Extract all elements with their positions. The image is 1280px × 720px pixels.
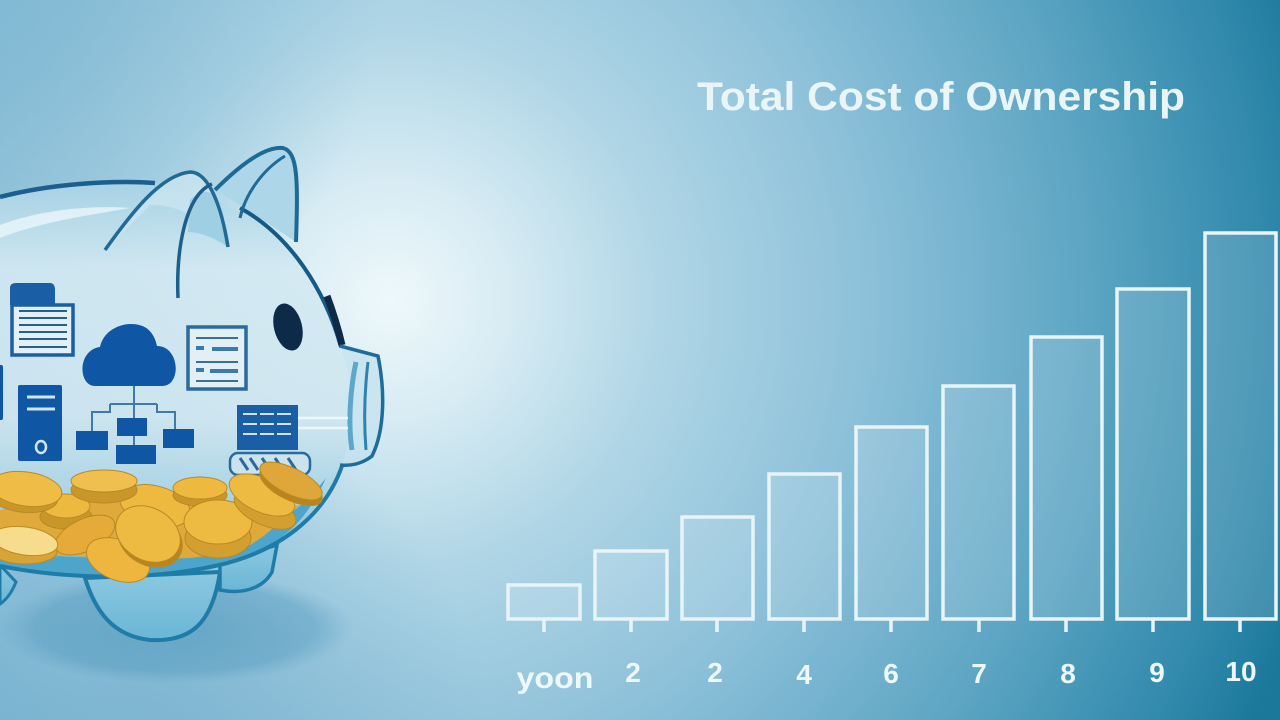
icon: server tower [18, 385, 62, 461]
pig far ear inner line [240, 156, 285, 218]
pig back leg left [0, 565, 16, 604]
pig inner ear fold [178, 184, 212, 298]
floor shadow [0, 572, 353, 684]
axis labels: 4 [796, 659, 812, 690]
pig back outline [0, 182, 155, 197]
icon: left edge server sliver [0, 365, 3, 420]
bar chart: cost by year [508, 233, 1276, 695]
pig body [0, 182, 382, 577]
coin pile [0, 454, 328, 591]
bars [508, 233, 1276, 619]
title: Total Cost of Ownership [697, 75, 1185, 119]
axis labels [516, 656, 1257, 695]
axis labels: yoon [516, 662, 594, 695]
pig front leg [85, 572, 220, 640]
piggy bank illustration [0, 148, 383, 640]
pig snout [298, 346, 383, 466]
axis ticks [544, 620, 1240, 632]
axis labels: 2 [707, 657, 723, 688]
axis labels: 2 [625, 657, 641, 688]
axis labels: 10 [1225, 656, 1257, 687]
pig near ear outline [105, 172, 228, 250]
ear shaded flap [188, 192, 228, 247]
head dark patch [327, 296, 342, 345]
axis labels: 9 [1149, 657, 1165, 688]
pig head outline [240, 208, 341, 347]
icon: keyboard strip [230, 453, 310, 475]
icon: report document [188, 327, 246, 389]
pig rear leg [220, 545, 277, 591]
icon: text panel [237, 405, 298, 450]
pig near ear [105, 172, 228, 250]
pig body lower outline [0, 466, 342, 577]
pile base coins [0, 490, 300, 560]
axis labels: 6 [883, 658, 899, 689]
icon: cloud [82, 324, 176, 386]
axis labels: 7 [971, 658, 987, 689]
pig eye [269, 300, 307, 354]
axis labels: 8 [1060, 658, 1076, 689]
icon: folder document [10, 283, 73, 355]
body top highlight [0, 207, 130, 238]
icon: network hierarchy [76, 386, 194, 464]
pig body lower band [0, 478, 326, 577]
pig far ear [215, 148, 297, 242]
